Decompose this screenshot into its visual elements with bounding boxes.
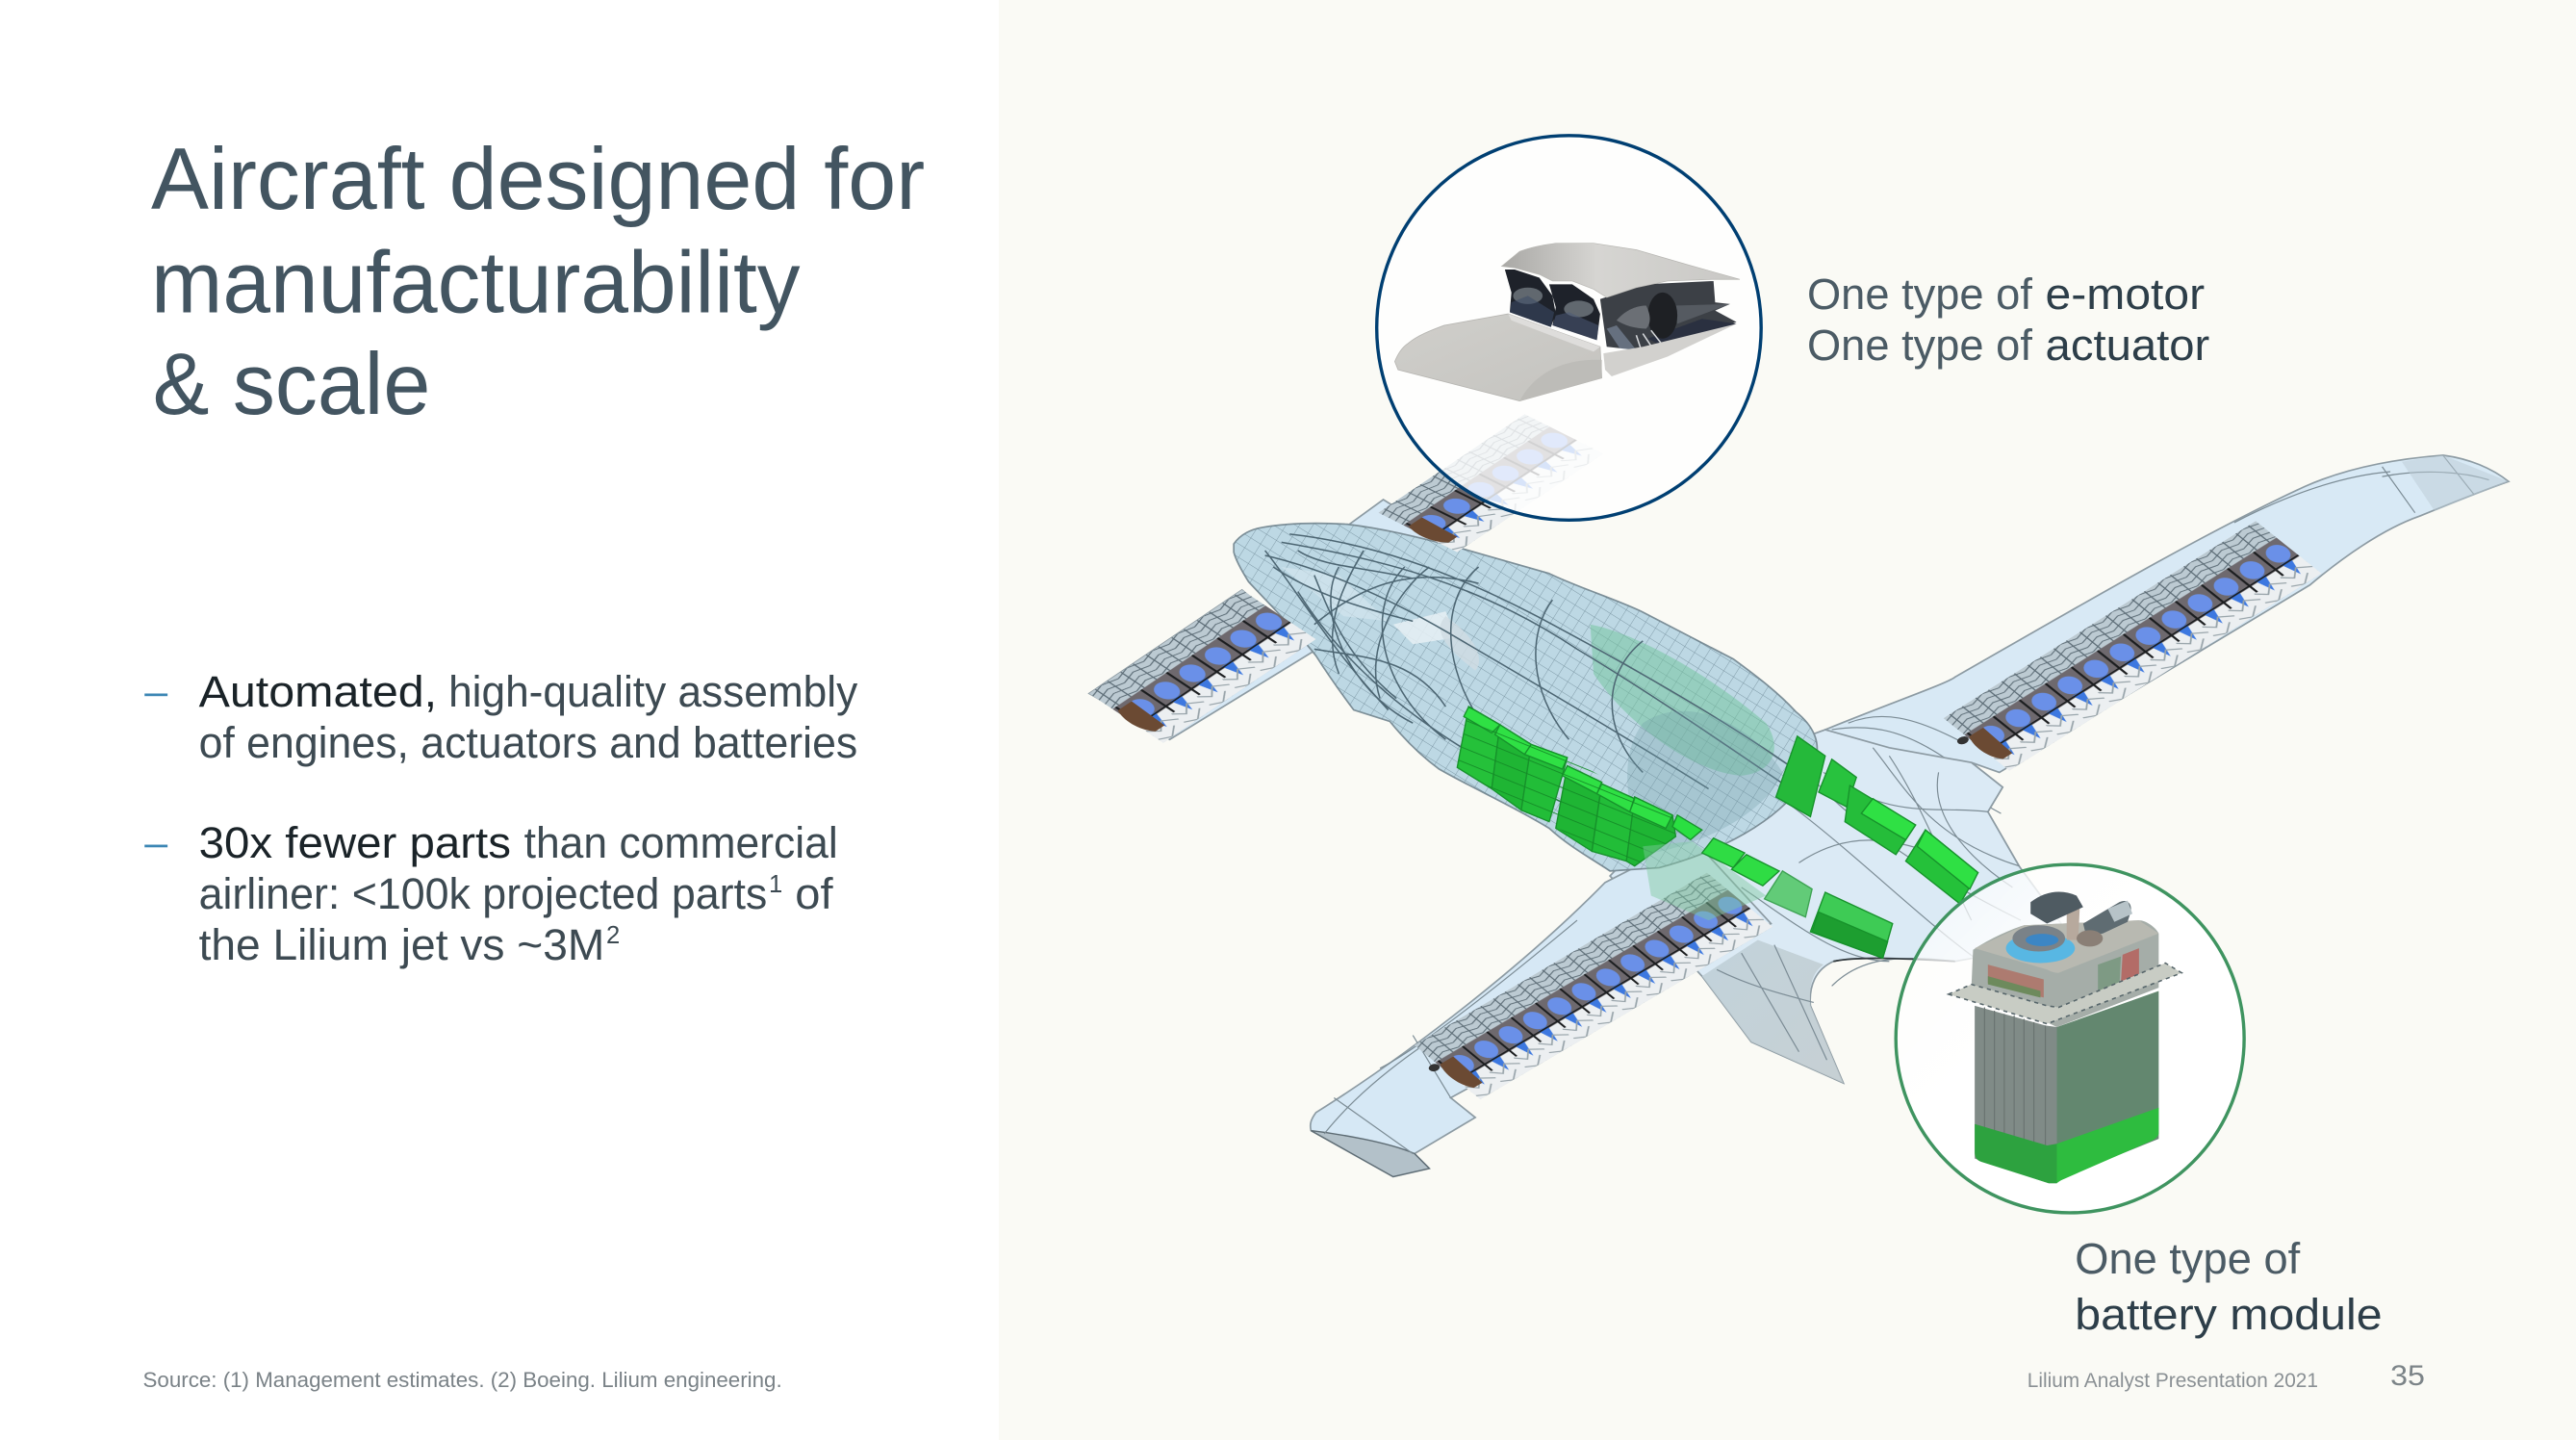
title: Aircraft designed for — [151, 131, 925, 228]
bullet: automated assembly: of engines, actuators and batteries — [199, 718, 857, 767]
cabin window and translucent green area — [1282, 567, 1774, 776]
bullet: fewer parts: than commercial — [524, 818, 838, 867]
label: battery module: One type of — [2075, 1234, 2301, 1283]
title: & scale — [153, 336, 430, 433]
bullet: fewer parts: the Lilium jet vs ~3M — [199, 920, 604, 969]
engine bank: near main wing — [1406, 873, 1773, 1105]
label: e-motor and actuator: actuator — [2046, 321, 2209, 370]
label: e-motor and actuator: One type of — [1807, 270, 2032, 319]
engine bank: right front wing — [1377, 414, 1603, 553]
label: e-motor and actuator: One type of — [1807, 321, 2032, 370]
bullet: automated assembly: Automated, — [199, 667, 437, 716]
near main wing — [1311, 838, 1771, 1176]
footer: presentation name: Lilium Analyst Presentation 2021 — [2028, 1369, 2318, 1392]
bullet: fewer parts: airliner: <100k projected parts — [199, 869, 767, 918]
label: battery module: battery module — [2075, 1290, 2383, 1339]
bullet: fewer parts: 30x fewer parts — [199, 818, 511, 867]
label: battery module — [2075, 1234, 2383, 1339]
source note: Source: (1) Management estimates. (2) Boeing. Lilium engineering. — [143, 1368, 782, 1392]
battery packs: lower chain — [1643, 838, 1893, 958]
icon: e-motor module — [1394, 244, 1740, 401]
label: e-motor and actuator: e-motor — [2046, 270, 2205, 319]
icon: battery module — [1949, 891, 2181, 1183]
callout circle: battery module — [1896, 864, 2244, 1213]
bullet: fewer parts: 2 — [606, 922, 620, 949]
bullet: automated assembly — [144, 667, 858, 767]
aircraft illustration — [1087, 414, 2509, 1176]
battery packs: upper chain — [1776, 736, 1978, 904]
bullet: fewer parts: 1 — [769, 871, 782, 898]
bullet: fewer parts — [144, 818, 838, 969]
far main wing — [1825, 455, 2509, 866]
engine bank: far main wing — [1934, 521, 2321, 777]
label: e-motor and actuator — [1807, 270, 2209, 370]
panel: illustration background — [999, 0, 2576, 1440]
engine bank: left front wing — [1087, 590, 1316, 744]
aft body and tail — [1610, 730, 2074, 1083]
battery packs: fuselage group — [1457, 707, 1702, 866]
callout circle: e-motor — [1377, 136, 1761, 520]
title — [151, 131, 925, 433]
bullet: automated assembly: high-quality assembly — [448, 667, 858, 716]
fuselage — [1234, 524, 1817, 871]
footer: page number: 35 — [2390, 1360, 2425, 1392]
bullet: fewer parts: of — [795, 869, 833, 918]
front wings — [1089, 500, 1479, 739]
title: manufacturability — [151, 234, 801, 331]
